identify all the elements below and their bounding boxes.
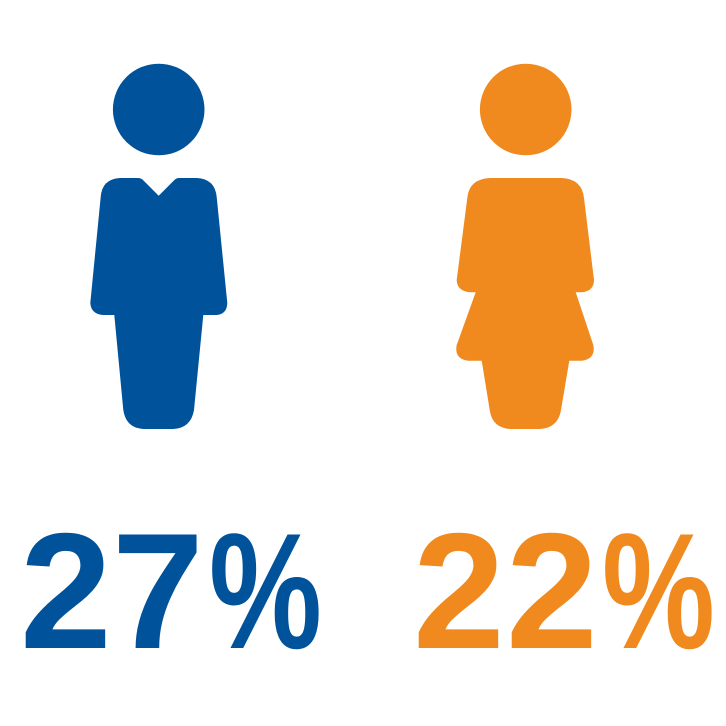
statistic: female 22%: %	[602, 500, 715, 684]
icon: female figure	[456, 64, 594, 429]
statistic: male 27%: 7	[112, 499, 204, 683]
statistic: male 27%	[20, 499, 322, 684]
statistic: female 22%	[413, 499, 715, 684]
statistic: female 22%: 2	[506, 499, 598, 683]
statistic: male 27%: 2	[20, 499, 112, 683]
icon: male figure	[90, 64, 227, 429]
statistic: female 22%: 2	[413, 499, 505, 683]
statistic: male 27%: %	[209, 500, 322, 684]
